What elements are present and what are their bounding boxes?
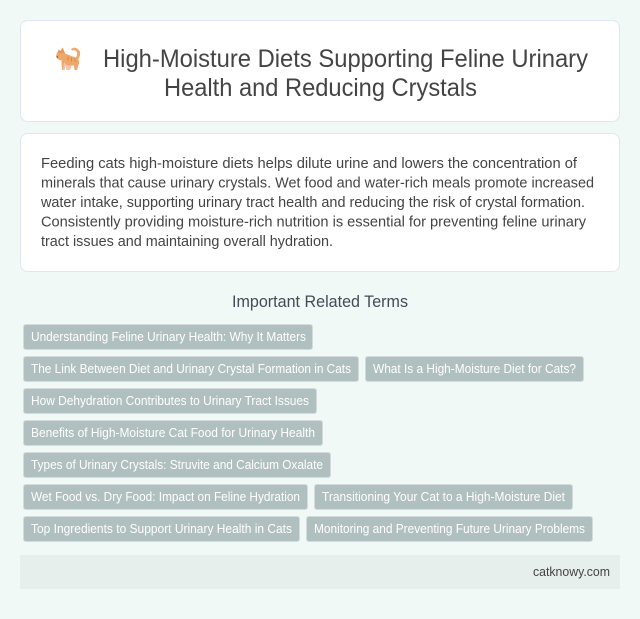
panel: summary card [20, 134, 620, 272]
tag: link between diet: The Link Between Diet and Urinary Crystal Formation in Cats [31, 362, 351, 376]
tag: ingredients: Top Ingredients to Support Urinary Health in Cats [31, 522, 292, 536]
summary text: Feeding cats high-moisture diets helps dilute urine and lowers the concentration of [41, 156, 578, 172]
tag: understanding [24, 324, 312, 350]
tag: monitoring: Monitoring and Preventing Future Urinary Problems [314, 522, 585, 536]
tag: link between diet [24, 356, 358, 382]
summary text: minerals that cause urinary crystals. Wet food and water-rich meals promote increased [41, 176, 594, 192]
summary text: tract issues and maintaining overall hydration. [41, 234, 333, 250]
related term tags [24, 324, 592, 542]
tag: benefits [24, 420, 322, 446]
tag: what is [366, 356, 584, 382]
title text: High-Moisture Diets Supporting Feline Urinary [103, 45, 588, 73]
tag: understanding: Understanding Feline Urinary Health: Why It Matters [31, 330, 306, 344]
tag: what is: What Is a High-Moisture Diet for Cats? [373, 362, 576, 376]
footer: catknowy.com [533, 565, 610, 579]
tag: wet vs dry: Wet Food vs. Dry Food: Impact on Feline Hydration [31, 490, 300, 504]
tag: transitioning: Transitioning Your Cat to a High-Moisture Diet [322, 490, 565, 504]
icon: cat [56, 48, 80, 70]
heading: important related terms: Important Related Terms [232, 293, 408, 311]
tag: wet vs dry [24, 484, 308, 510]
panel: title card: Health and Reducing Crystals [164, 74, 477, 102]
summary text: Consistently providing moisture-rich nutrition is essential for preventing feline urinary [41, 214, 587, 230]
tag: types: Types of Urinary Crystals: Struvite and Calcium Oxalate [31, 458, 323, 472]
tag: transitioning [314, 484, 572, 510]
tag: dehydration [24, 388, 316, 414]
summary text: water intake, supporting urinary tract health and reducing the risk of crystal formation. [40, 195, 585, 211]
tag: monitoring [306, 516, 592, 542]
tag: dehydration: How Dehydration Contributes to Urinary Tract Issues [31, 394, 309, 408]
tag: ingredients [24, 516, 300, 542]
tag: benefits: Benefits of High-Moisture Cat Food for Urinary Health [31, 426, 315, 440]
summary text [40, 156, 594, 250]
tag: types [24, 452, 330, 478]
footer [20, 555, 620, 589]
panel: title card [20, 20, 620, 122]
